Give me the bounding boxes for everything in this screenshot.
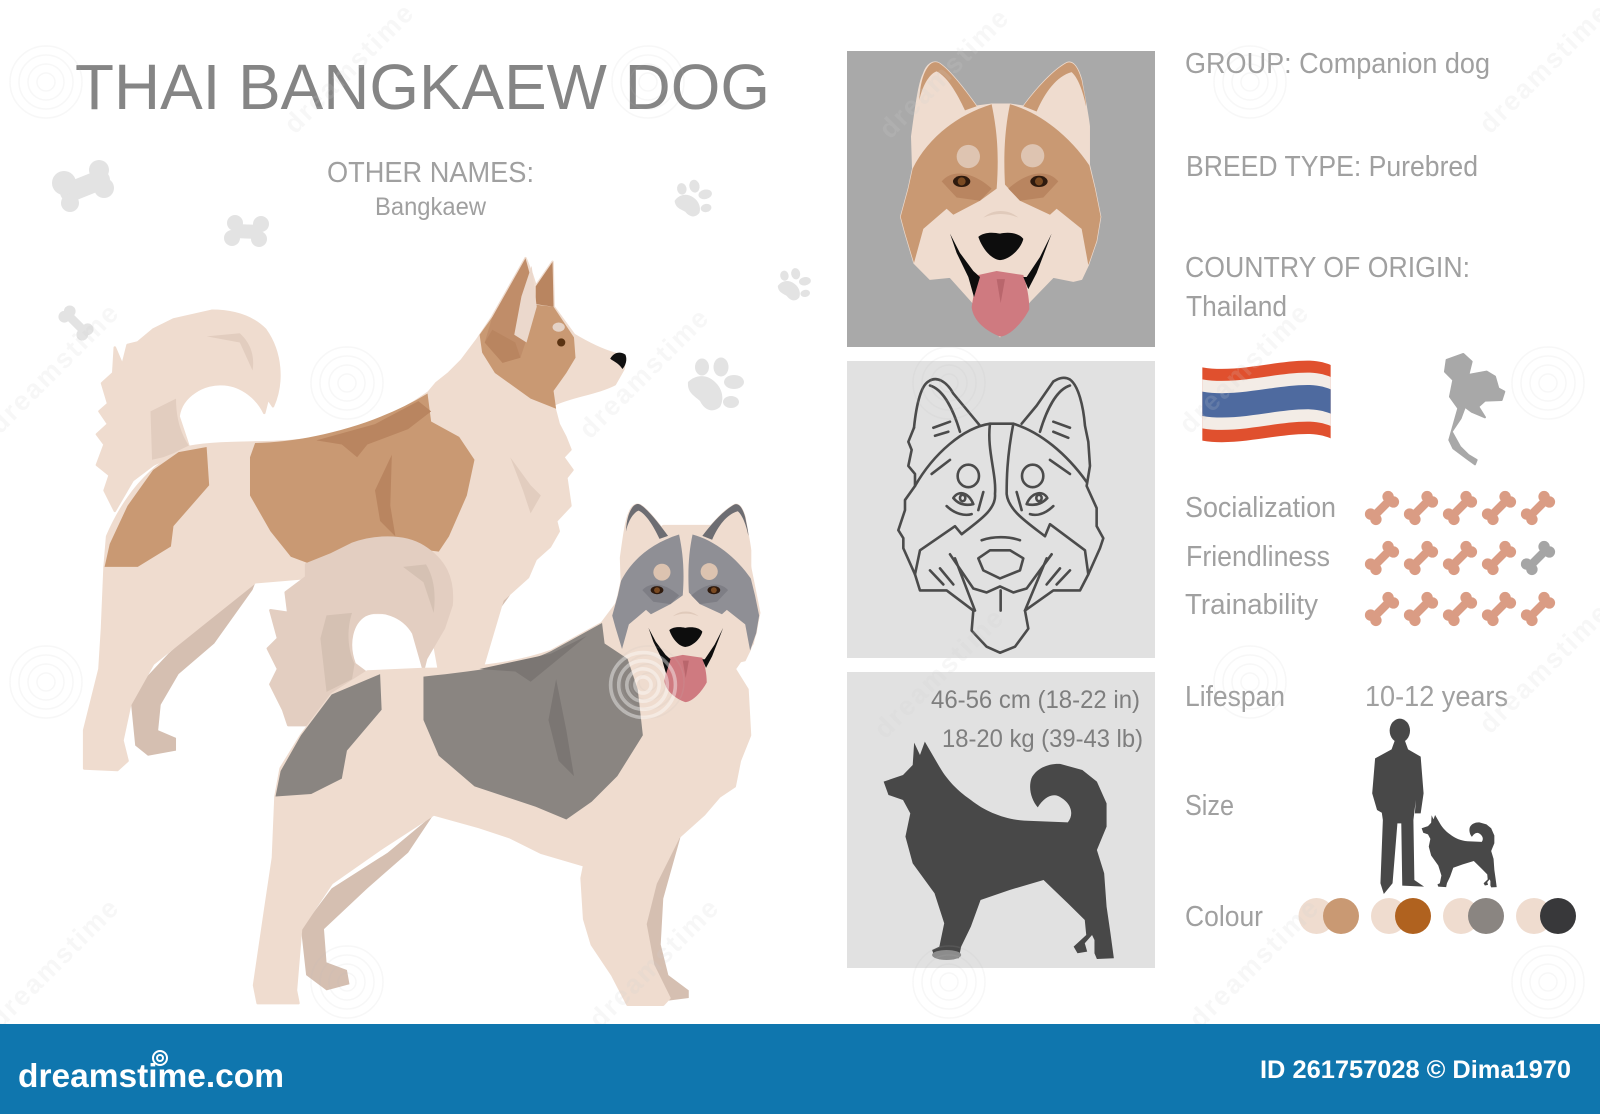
rear patch	[105, 447, 209, 567]
text: dreamstime	[868, 602, 1011, 744]
footer banner	[0, 1024, 1600, 1114]
swatch pair 3	[1443, 898, 1504, 934]
decorative bones and paws	[52, 160, 814, 410]
breed type text: BREED TYPE: Purebred	[1186, 151, 1478, 183]
ear shading	[485, 330, 520, 363]
other names block	[327, 157, 534, 221]
text: dreamstime	[583, 892, 726, 1034]
small dog silhouette	[1422, 815, 1497, 887]
weight text: 18-20 kg (39-43 lb)	[942, 725, 1143, 753]
tail	[97, 311, 279, 511]
swatch pair 4	[1516, 898, 1576, 934]
size comparison	[1185, 719, 1497, 894]
text: dreamstime	[1183, 892, 1326, 1034]
banner background	[0, 1024, 1600, 1114]
body	[84, 258, 625, 770]
body	[254, 526, 759, 1005]
panel: colour head portrait	[847, 51, 1155, 347]
tail shading	[320, 564, 435, 692]
dog head colour	[901, 62, 1101, 337]
rating: friendliness	[1186, 541, 1555, 575]
panel background	[847, 672, 1155, 968]
text: dreamstime	[873, 2, 1016, 144]
head	[612, 504, 759, 702]
saddle shading	[316, 401, 431, 536]
icon: small bone	[224, 215, 269, 247]
saddle shading	[480, 636, 587, 776]
colour label: Colour	[1185, 901, 1263, 933]
label: Friendliness	[1186, 541, 1330, 573]
brow spot	[553, 323, 565, 332]
rating: trainability	[1185, 589, 1555, 626]
bones	[1365, 491, 1555, 525]
swatch pair 2	[1371, 898, 1431, 934]
panel background	[847, 51, 1155, 347]
panel: line art head	[847, 361, 1155, 658]
lifespan row	[1185, 681, 1508, 713]
other names value: Bangkaew	[375, 193, 487, 221]
far hind leg	[130, 583, 255, 756]
size label: Size	[1185, 790, 1234, 822]
tail shading	[151, 333, 253, 460]
swatch pair 1	[1298, 898, 1359, 934]
image id and credit: ID 261757028 © Dima1970	[1260, 1056, 1571, 1084]
icon: paw large	[688, 358, 744, 410]
panel background	[847, 361, 1155, 658]
text: dreamstime	[1173, 297, 1316, 439]
text: dreamstime	[573, 302, 716, 444]
grey and cream dog	[254, 504, 759, 1005]
tail	[268, 538, 452, 725]
logo swirl	[153, 1051, 167, 1065]
human silhouette	[1372, 719, 1424, 894]
saddle patch	[423, 623, 643, 819]
tan and cream dog	[84, 258, 626, 770]
silhouette dog	[884, 742, 1114, 960]
rear patch	[276, 674, 382, 797]
label: Socialization	[1185, 492, 1336, 524]
title: THAI BANGKAEW DOG	[75, 51, 770, 123]
saddle patch	[250, 393, 474, 564]
colour swatches	[1185, 898, 1576, 934]
label: Trainability	[1185, 589, 1318, 621]
head mask	[480, 304, 576, 409]
country of origin heading: COUNTRY OF ORIGIN:	[1185, 252, 1470, 284]
dog head outline	[898, 378, 1103, 653]
height text: 46-56 cm (18-22 in)	[931, 686, 1140, 714]
logo text: dreamstime.com	[18, 1057, 284, 1094]
rating: socialization	[1185, 491, 1555, 525]
group text: GROUP: Companion dog	[1185, 48, 1490, 80]
bones	[1365, 592, 1555, 626]
inner ear	[514, 266, 537, 342]
icon: large bone	[52, 160, 114, 212]
lifespan value: 10-12 years	[1365, 681, 1508, 713]
far front leg	[459, 595, 510, 669]
bones	[1365, 541, 1555, 575]
nose	[610, 353, 626, 369]
chest fur shading	[510, 457, 541, 513]
icon: tiny bone	[58, 305, 94, 341]
far ear	[536, 262, 554, 307]
eye	[557, 338, 565, 347]
text: dreamstime	[278, 0, 421, 139]
country value: Thailand	[1186, 291, 1287, 323]
ear	[485, 258, 533, 363]
far hind leg	[301, 814, 434, 990]
icon: paw middle	[775, 266, 814, 303]
other names heading: OTHER NAMES:	[327, 157, 534, 189]
lifespan label: Lifespan	[1185, 681, 1285, 713]
panel: silhouette and measurements	[847, 672, 1155, 968]
far front leg	[645, 835, 689, 1001]
icon: Thai flag	[1202, 361, 1331, 442]
icon: map of Thailand	[1445, 354, 1504, 464]
icon: paw top	[671, 177, 716, 220]
